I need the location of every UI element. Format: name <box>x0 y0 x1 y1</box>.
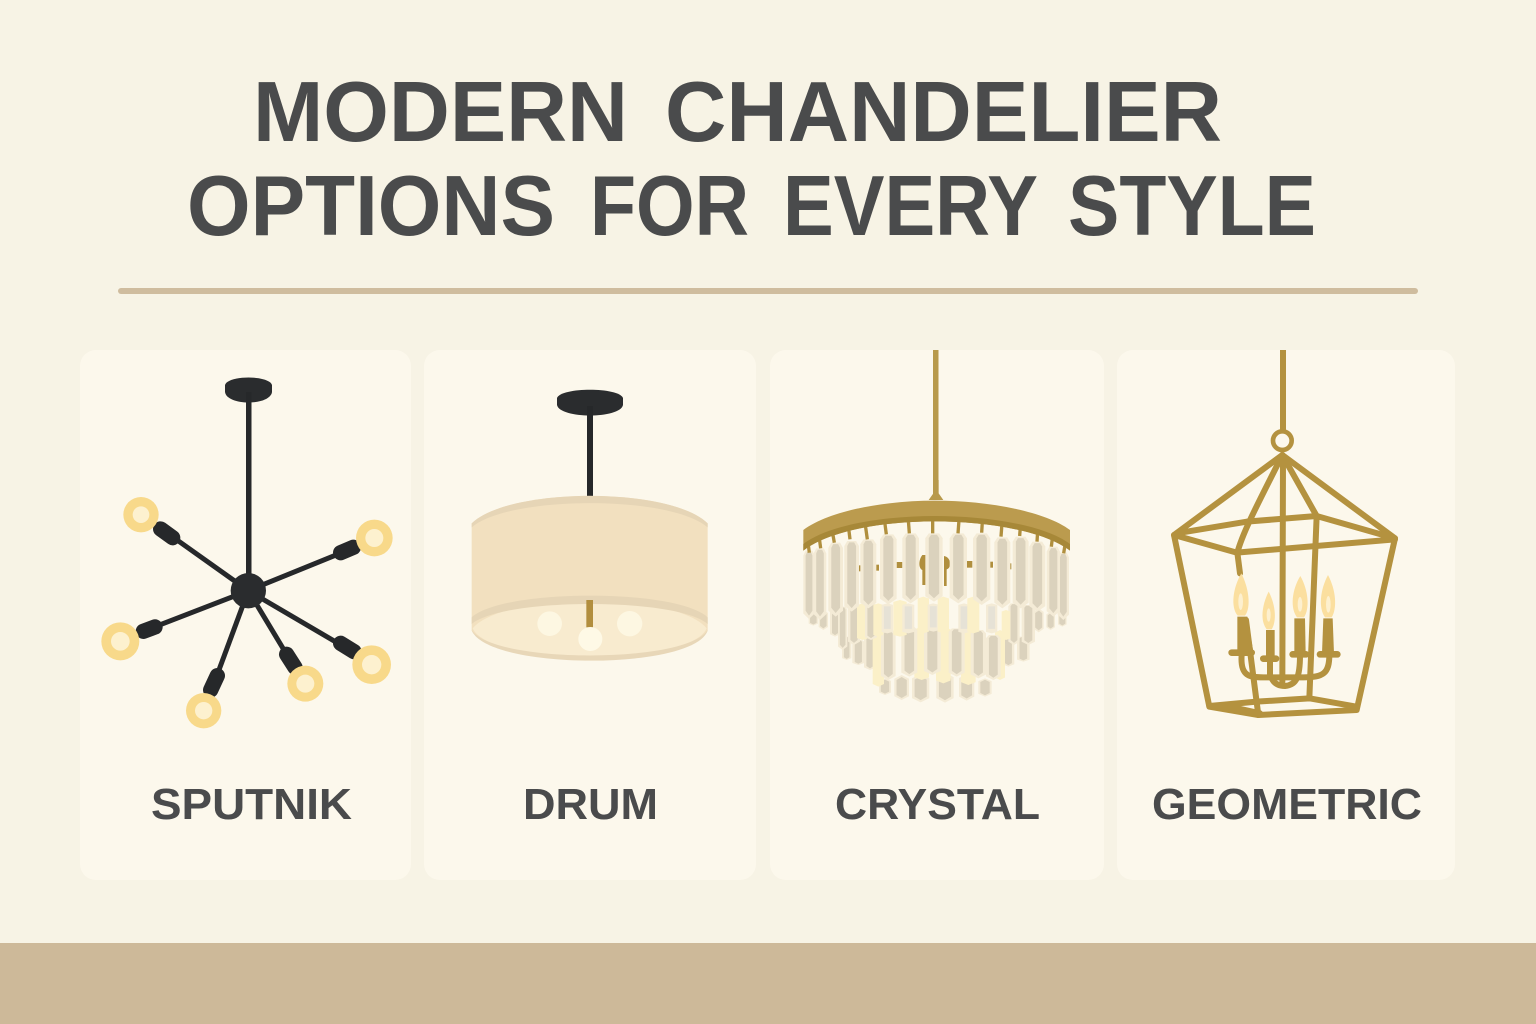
icon: drum chandelier <box>472 390 708 661</box>
lantern frame <box>1174 455 1395 715</box>
label: geometric: GEOMETRIC <box>1152 780 1422 829</box>
panel: drum <box>424 350 756 880</box>
ring hooks <box>808 519 1065 553</box>
icon: geometric lantern <box>1174 350 1395 715</box>
upper crystals <box>803 533 1069 620</box>
title: EVERY <box>783 159 1038 254</box>
label: crystal: CRYSTAL <box>835 780 1040 829</box>
inner gold ring <box>858 555 1011 586</box>
icon: crystal chandelier <box>803 350 1070 703</box>
candle arms <box>1232 653 1337 686</box>
icon: sputnik chandelier <box>101 378 393 728</box>
candles <box>1237 617 1334 658</box>
title <box>187 65 1316 254</box>
floor band <box>0 943 1536 1024</box>
title: MODERN <box>253 65 628 160</box>
panel: sputnik <box>80 350 411 880</box>
title: OPTIONS <box>187 159 555 254</box>
title: STYLE <box>1068 159 1316 254</box>
title: FOR <box>590 159 749 254</box>
label: sputnik: SPUTNIK <box>151 780 352 829</box>
title: CHANDELIER <box>665 65 1222 160</box>
panel: crystal <box>770 350 1104 880</box>
label: drum: DRUM <box>523 780 658 829</box>
flames <box>1233 573 1335 629</box>
ring <box>803 501 1070 551</box>
crystal tiers <box>809 597 1067 703</box>
panel: geometric <box>1117 350 1455 880</box>
